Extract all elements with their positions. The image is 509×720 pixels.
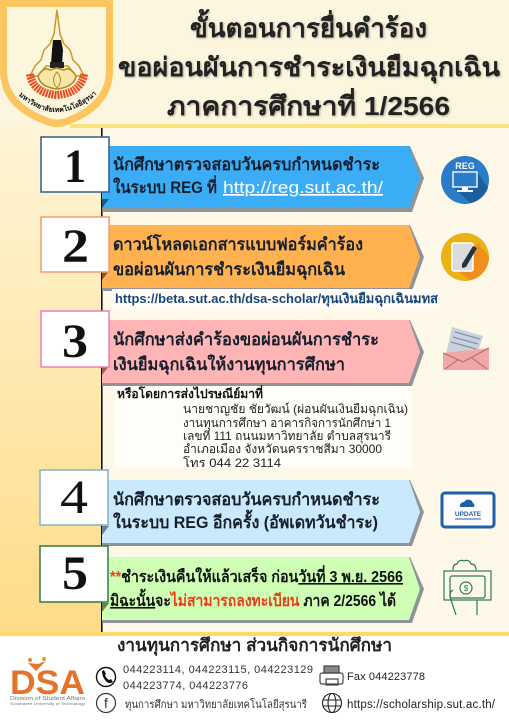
- step 3 postal address: โทร 044 22 3114: [183, 456, 281, 470]
- DSA logo: Division of Student Affairs: [10, 696, 86, 702]
- step 4 text: [113, 490, 380, 532]
- step 1 text: http://reg.sut.ac.th/: [223, 178, 383, 197]
- DSA logo: Suranaree University of Technology: [10, 701, 85, 706]
- step 4 arrow banner: [102, 480, 424, 546]
- step 4 text: ในระบบ REG อีกครั้ง (อัพเดทวันชำระ): [113, 509, 378, 532]
- step 3 number box: [41, 311, 109, 368]
- step 1 number box: [41, 137, 109, 193]
- step 4 number box: [40, 470, 108, 525]
- step 5 number box: [40, 546, 108, 602]
- university logo shield: [0, 0, 113, 127]
- step 2 number box: 2: [62, 220, 89, 273]
- step 3 postal address: อำเภอเมือง จังหวัดนครราชสีมา 30000: [183, 442, 382, 456]
- footer heading: งานทุนการศึกษา ส่วนกิจการนักศึกษา: [117, 635, 392, 656]
- step 4 number box: 4: [60, 471, 88, 524]
- step 2 text: ดาวน์โหลดเอกสารแบบฟอร์มคำร้อง: [113, 234, 363, 254]
- icon: printer: [320, 666, 343, 685]
- icon: facebook: [96, 694, 116, 712]
- phone numbers: 044223114, 044223115, 044223129: [123, 664, 313, 676]
- title: ภาคการศึกษาที่ 1/2566: [167, 87, 450, 121]
- step 1 text: [113, 155, 383, 197]
- icon: phone: [96, 668, 116, 686]
- icon: update tablet: [442, 493, 494, 527]
- step 5 arrow banner: [102, 557, 424, 623]
- step 5 text: มิฉะนั้นจะไม่สามารถลงทะเบียน ภาค 2/2566 ได้: [110, 588, 396, 610]
- step 2 arrow banner: [102, 225, 424, 291]
- step 3 postal address: หรือโดยการส่งไปรษณีย์มาที่: [117, 385, 263, 401]
- step 5 number box: 5: [62, 547, 88, 600]
- title: ขั้นตอนการยื่นคำร้อง: [190, 8, 427, 43]
- icon: globe: [322, 694, 342, 712]
- step 2 text: [113, 234, 363, 280]
- icon: envelope: [443, 327, 489, 370]
- phone numbers: 044223774, 044223776: [123, 680, 248, 692]
- step 3 text: นักศึกษาส่งคำร้องขอผ่อนผันการชำระ: [113, 330, 379, 349]
- step 2 text: ขอผ่อนผันการชำระเงินยืมฉุกเฉิน: [113, 259, 345, 280]
- step 1 arrow banner: [102, 146, 424, 212]
- icon: REG monitor: [441, 156, 489, 204]
- icon: facebook: f: [104, 695, 108, 711]
- phone numbers: [123, 664, 313, 692]
- step 4 text: นักศึกษาตรวจสอบวันครบกำหนดชำระ: [113, 490, 380, 509]
- step 2 number box: [41, 217, 109, 273]
- icon: form and pen: [441, 233, 489, 281]
- step 3 arrow banner: [102, 320, 424, 386]
- step 1 number box: 1: [64, 140, 86, 193]
- step 5 text: **ชำระเงินคืนให้แล้วเสร็จ ก่อนวันที่ 3 พ.ย. 2566: [110, 565, 403, 586]
- step 2 link: https://beta.sut.ac.th/dsa-scholar/ทุนเงินยืมฉุกเฉินมทส: [115, 291, 438, 307]
- website: https://scholarship.sut.ac.th/: [347, 699, 496, 711]
- step 1 text: ในระบบ REG ที่: [113, 175, 217, 197]
- icon: money in hand: [444, 560, 491, 615]
- title: [118, 8, 500, 121]
- facebook name: ทุนการศึกษา มหาวิทยาลัยเทคโนโลยีสุรนารี: [125, 697, 307, 711]
- title: ขอผ่อนผันการชำระเงินยืมฉุกเฉิน: [118, 52, 500, 84]
- icon: update tablet: UPDATE: [455, 511, 482, 518]
- step 5 text: [110, 565, 403, 610]
- DSA logo: DSA: [10, 664, 85, 702]
- fax: Fax 044223778: [347, 671, 425, 683]
- step 3 postal address: นายชาญชัย ชัยวัฒน์ (ผ่อนผันเงินยืมฉุกเฉิน): [183, 402, 408, 417]
- step 3 postal address: เลขที่ 111 ถนนมหาวิทยาลัย ตำบลสุรนารี: [183, 427, 392, 444]
- step 3 number box: 3: [62, 315, 88, 368]
- step 3 postal address: งานทุนการศึกษา อาคารกิจการนักศึกษา 1: [183, 416, 391, 431]
- icon: REG monitor: REG: [455, 161, 475, 171]
- step 3 text: เงินยืมฉุกเฉินให้งานทุนการศึกษา: [113, 354, 345, 375]
- step 1 text: นักศึกษาตรวจสอบวันครบกำหนดชำระ: [113, 155, 380, 174]
- step 3 postal address: [115, 385, 412, 470]
- step 3 text: [113, 330, 379, 375]
- icon: money in hand: $: [464, 584, 469, 593]
